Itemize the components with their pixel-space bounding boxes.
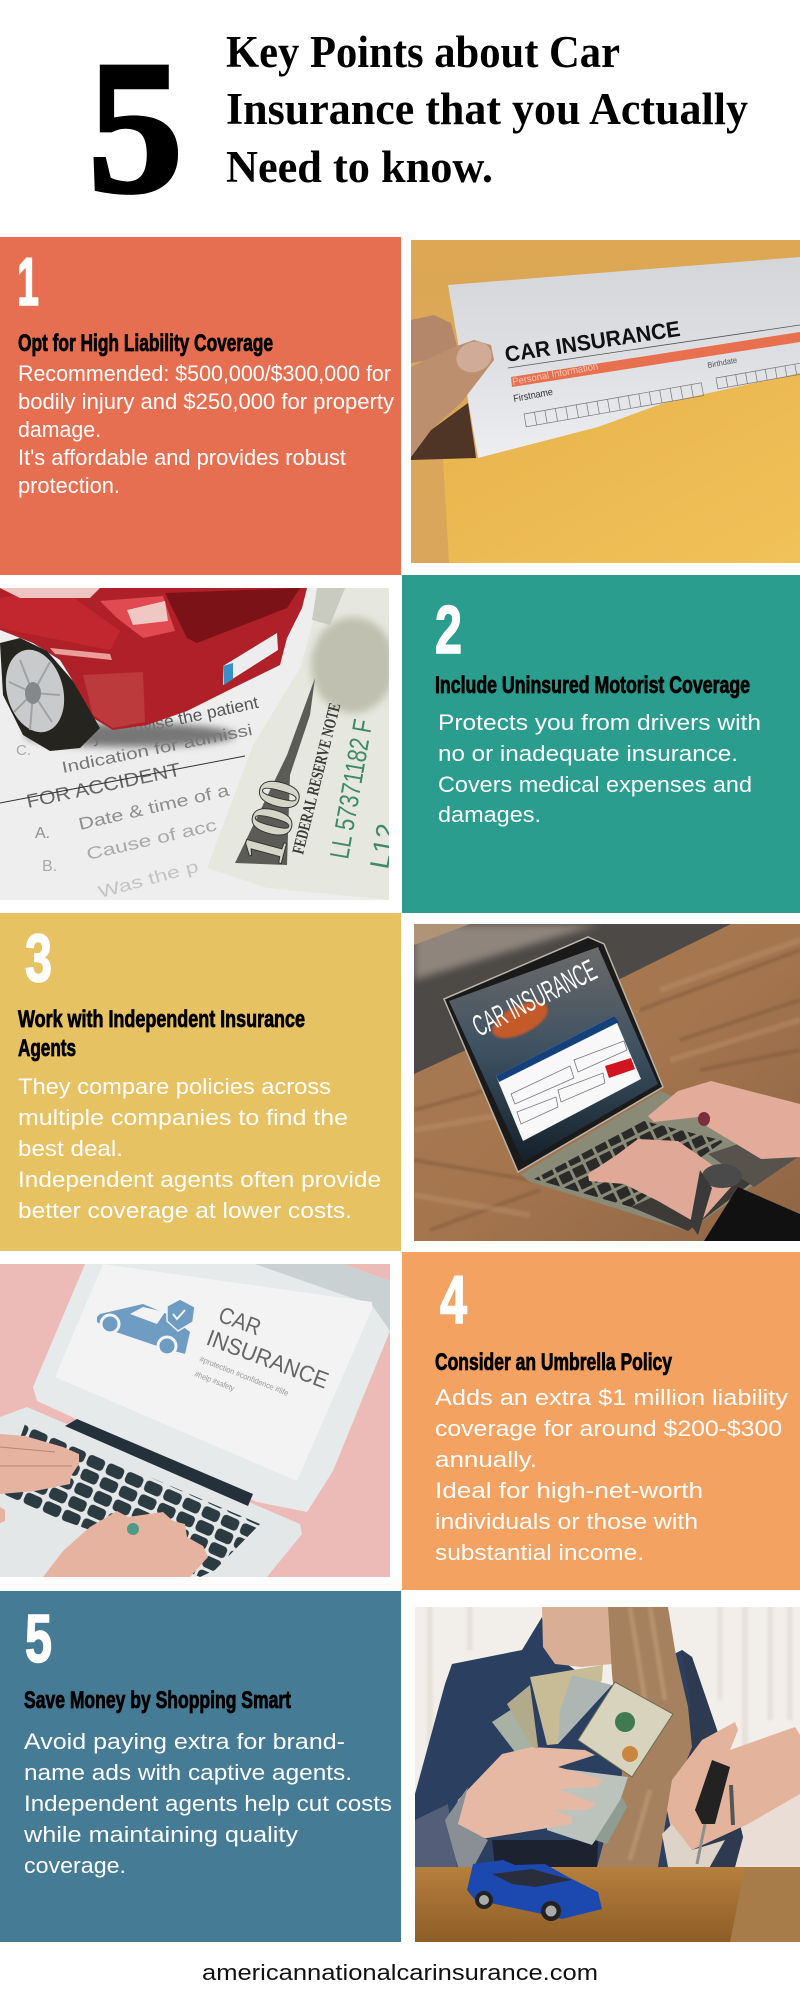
body text: point 4: coverage for around $200-$300: [435, 1416, 782, 1441]
number 5: 5: [25, 1601, 52, 1677]
photo: laptop on pink desk: CAR: [215, 1301, 265, 1340]
form text: [16, 693, 260, 902]
photo: woman holding money, car keys and toy car: [415, 1607, 800, 1942]
title: Insurance that you Actually: [226, 84, 748, 134]
dollar bill: [207, 588, 402, 900]
hand behind paper: [411, 315, 476, 460]
title: Key Points about Car: [226, 27, 620, 77]
money fan: [492, 1665, 673, 1845]
car key: [695, 1760, 733, 1864]
body text: point 3: best deal.: [18, 1136, 123, 1161]
footer website: americannationalcarinsurance.com: [202, 1960, 598, 1985]
photo: car insurance form in envelope: CAR INSURANCE: [503, 316, 682, 367]
panel: point 3: [0, 913, 401, 1251]
shadow under car: [25, 723, 235, 747]
photo: laptop on pink desk: INSURANCE: [203, 1324, 332, 1394]
body text: point 5: coverage.: [24, 1853, 126, 1878]
panel: point 5: [0, 1591, 401, 1942]
photo: car insurance form in envelope: Firstname: [513, 387, 554, 405]
number 4: 4: [440, 1262, 467, 1338]
photo: laptop showing car insurance page: CAR INSURANCE: [467, 954, 602, 1043]
heading: point 3: Agents: [18, 1035, 76, 1062]
body text: point 2: [438, 710, 761, 827]
dollar bill: L12: [364, 821, 402, 871]
body text: point 1: protection.: [18, 473, 120, 498]
neck: [542, 1607, 612, 1667]
photo: laptop on pink desk: [0, 1264, 390, 1577]
heading: point 3: [18, 1006, 305, 1062]
laptop screen: [444, 937, 663, 1172]
form text: C.: [16, 742, 31, 759]
photo: laptop showing car insurance page: [414, 924, 800, 1241]
number 2: 2: [435, 592, 462, 668]
body text: point 1: bodily injury and $250,000 for property: [18, 389, 394, 414]
right hand: [667, 1722, 800, 1850]
dollar bill: LL 57371182 F: [324, 717, 378, 861]
body text: point 3: Independent agents often provide: [18, 1167, 381, 1192]
thumb: [411, 337, 496, 457]
body text: point 4: substantial income.: [435, 1540, 644, 1565]
body text: point 4: Ideal for high-net-worth: [435, 1478, 703, 1503]
body text: point 3: better coverage at lower costs.: [18, 1198, 352, 1223]
photo: car insurance form in envelope: Birthdate: [707, 356, 738, 370]
title: [226, 27, 748, 192]
body text: point 4: Adds an extra $1 million liability: [435, 1385, 788, 1410]
body text: point 5: Avoid paying extra for brand-: [24, 1729, 345, 1754]
left hand: [458, 1747, 602, 1838]
heading: point 4: Consider an Umbrella Policy: [435, 1349, 672, 1376]
body text: point 1: [18, 361, 394, 498]
laptop base: [0, 1407, 302, 1577]
big number 5: 5: [88, 23, 183, 233]
body text: point 2: Protects you from drivers with: [438, 710, 761, 735]
table: [415, 1867, 745, 1942]
form text: Indication for admissi: [60, 722, 254, 777]
number 1: 1: [17, 244, 39, 320]
photo: car insurance form in envelope: Personal Information: [512, 361, 599, 388]
body text: point 3: [18, 1074, 381, 1223]
blazer: [415, 1617, 743, 1874]
body text: point 1: Recommended: $500,000/$300,000 for: [18, 361, 391, 386]
body text: point 5: while maintaining quality: [23, 1822, 298, 1847]
heading: point 5: Save Money by Shopping Smart: [24, 1687, 291, 1714]
hands: [0, 1434, 208, 1577]
body text: point 5: name ads with captive agents.: [24, 1760, 352, 1785]
form text: Date & time of a: [77, 781, 232, 834]
toy blue car: [467, 1860, 602, 1921]
body text: point 5: Independent agents help cut costs: [24, 1791, 392, 1816]
photo: laptop on pink desk: #help #safety: [193, 1369, 236, 1393]
form text: Cause of acc: [85, 815, 219, 864]
hair: [597, 1607, 692, 1867]
panel: point 4: [402, 1252, 800, 1590]
title: Need to know.: [226, 142, 493, 192]
body text: point 4: individuals or those with: [435, 1509, 698, 1534]
body text: point 1: damage.: [18, 417, 101, 442]
toy red car: [0, 588, 307, 751]
body text: point 5: [23, 1729, 392, 1878]
photo: toy car and dollar bill on accident form: [0, 588, 402, 902]
form on screen: [496, 1016, 641, 1141]
heading: point 3: Work with Independent Insurance: [18, 1006, 305, 1033]
panel: point 2: [402, 575, 800, 913]
panel: point 1: [0, 237, 401, 575]
body text: point 2: no or inadequate insurance.: [438, 741, 738, 766]
form text: you advise the patient: [90, 693, 260, 747]
hands: [648, 1081, 800, 1159]
body text: point 4: annually.: [435, 1447, 537, 1472]
heading: point 1: Opt for High Liability Coverage: [18, 330, 273, 357]
dollar bill: FEDERAL RESERVE NOTE: [288, 701, 344, 856]
form text: B.: [42, 858, 57, 875]
body text: point 1: It's affordable and provides robust: [18, 445, 346, 470]
form text: A.: [35, 825, 50, 842]
form text: Was the p: [96, 857, 201, 902]
number 3: 3: [25, 920, 52, 996]
body text: point 2: Covers medical expenses and: [438, 772, 752, 797]
photo: car insurance form in envelope: [411, 240, 800, 563]
dollar bill: 100: [229, 772, 315, 871]
body text: point 4: [435, 1385, 788, 1565]
laptop lid: [33, 1264, 390, 1512]
body text: point 3: They compare policies across: [18, 1074, 331, 1099]
body text: point 2: damages.: [438, 802, 541, 827]
body text: point 3: multiple companies to find the: [18, 1105, 348, 1130]
photo: laptop on pink desk: #protection #confidence #life: [198, 1354, 290, 1398]
laptop base: [521, 1091, 752, 1231]
form text: FOR ACCIDENT: [25, 760, 183, 813]
car icon with shield: [97, 1299, 195, 1355]
